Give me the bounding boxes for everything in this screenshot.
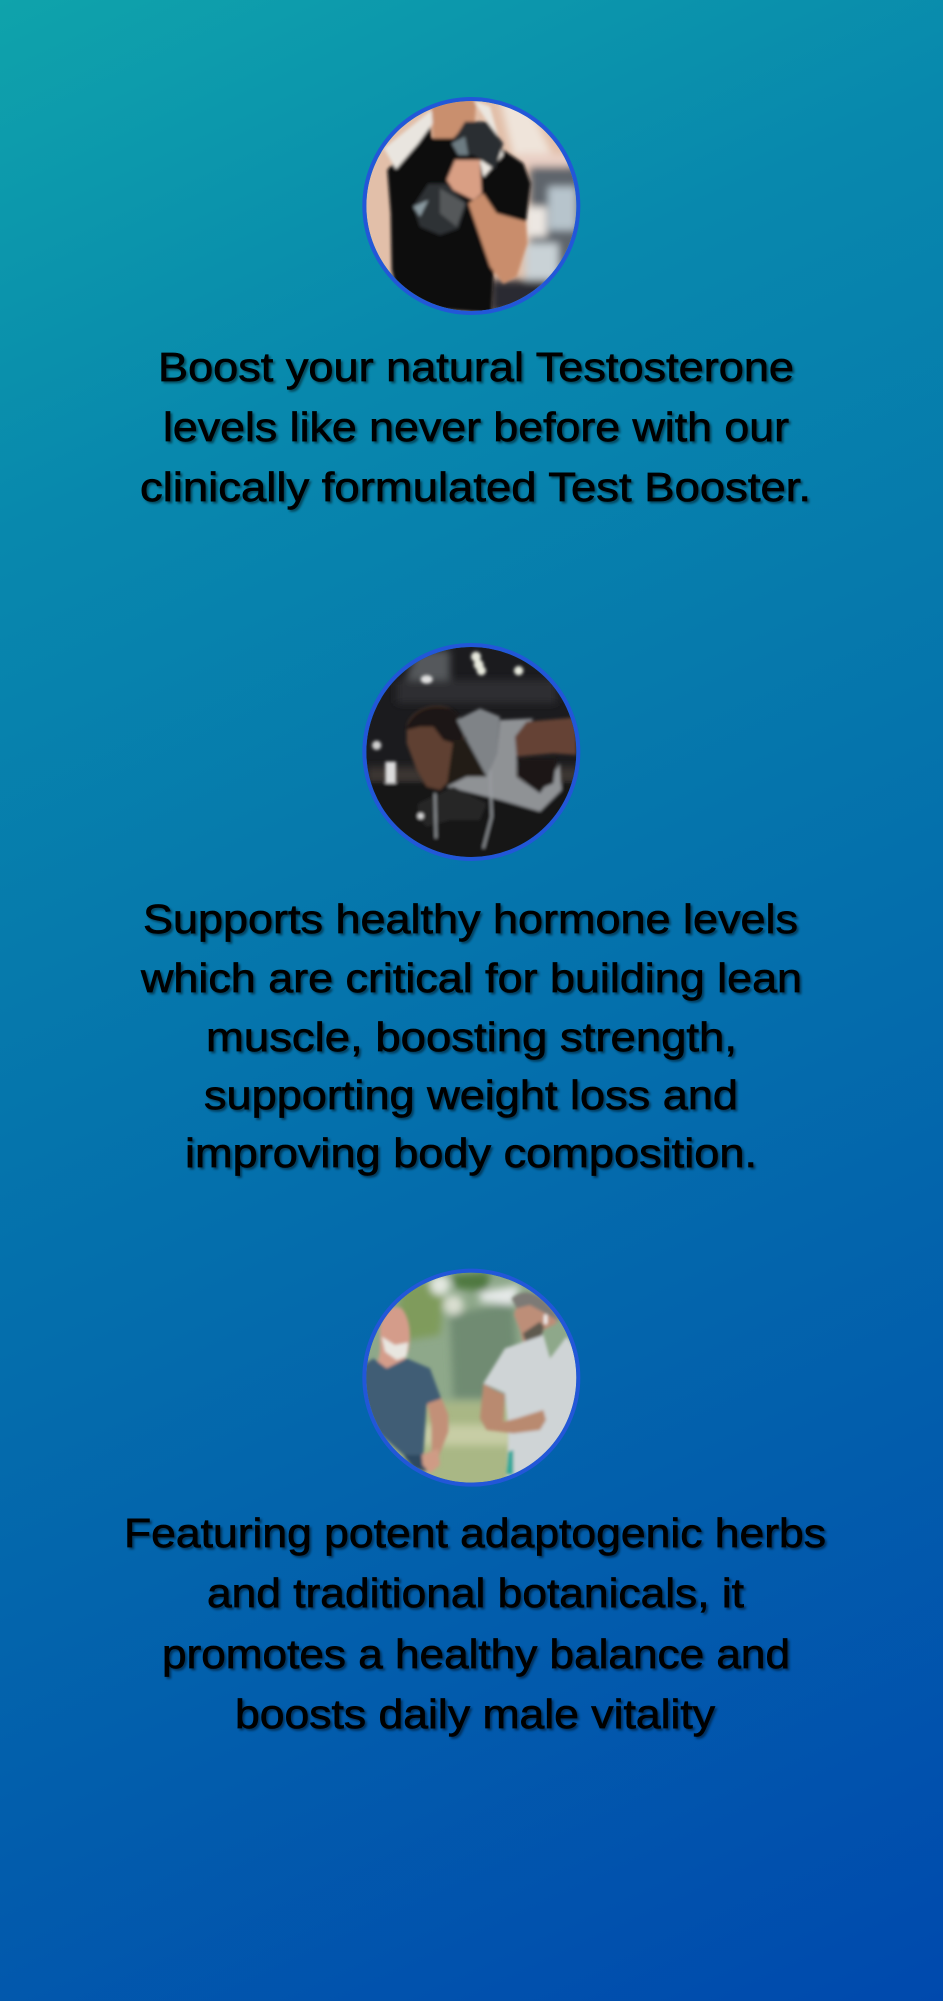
text block: hormone levels: improving body composition. <box>185 1130 757 1176</box>
text block: hormone levels: Supports healthy hormone levels <box>143 896 798 942</box>
text block: testosterone: Boost your natural Testosterone <box>158 344 794 390</box>
photo: two older men jogging <box>360 1265 587 1492</box>
text block: hormone levels <box>140 896 802 1176</box>
text block: hormone levels: muscle, boosting strength, <box>206 1014 737 1060</box>
photo: man doing a dumbbell push-up <box>360 640 587 867</box>
photo: man curling a dumbbell <box>360 93 587 320</box>
text block: hormone levels: which are critical for building lean <box>140 955 802 1001</box>
text block: adaptogenic herbs: boosts daily male vitality <box>235 1691 716 1737</box>
text block: adaptogenic herbs <box>124 1510 826 1737</box>
photo ring <box>364 1271 578 1485</box>
text block: testosterone: clinically formulated Test Booster. <box>140 464 811 510</box>
text block: adaptogenic herbs: Featuring potent adaptogenic herbs <box>124 1510 826 1556</box>
photo ring <box>364 99 578 313</box>
text block: adaptogenic herbs: and traditional botanicals, it <box>207 1570 745 1616</box>
text block: testosterone: levels like never before with our <box>163 404 789 450</box>
photo ring <box>364 645 578 859</box>
text block: testosterone <box>140 344 811 510</box>
text block: hormone levels: supporting weight loss and <box>204 1072 738 1118</box>
text block: adaptogenic herbs: promotes a healthy balance and <box>162 1631 790 1677</box>
